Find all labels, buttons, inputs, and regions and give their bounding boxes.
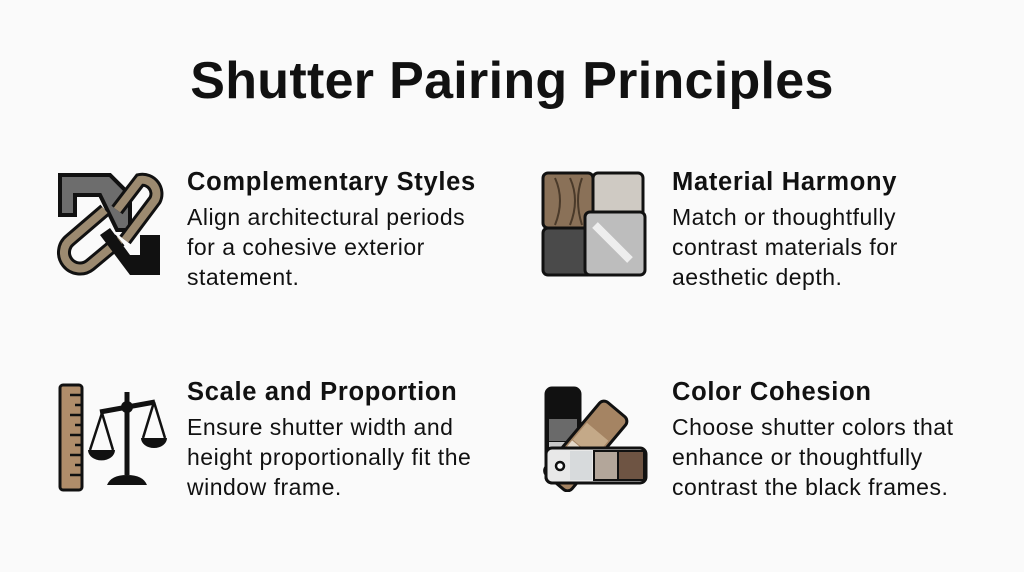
item: complementary styles: statement.: [187, 264, 299, 290]
item: scale and proportion: height proportionally fit the: [187, 444, 471, 470]
item: color cohesion: [672, 378, 953, 500]
item: material harmony: aesthetic depth.: [672, 264, 842, 290]
item: color cohesion: Color Cohesion: [672, 378, 872, 406]
item: color cohesion: Choose shutter colors that: [672, 414, 953, 440]
item: scale and proportion: Ensure shutter width and: [187, 414, 453, 440]
item: scale and proportion: window frame.: [187, 474, 342, 500]
item: color cohesion: enhance or thoughtfully: [672, 444, 923, 470]
item: color cohesion: contrast the black frames.: [672, 474, 948, 500]
icon: color fan: [543, 386, 648, 492]
icon: ruler and scale: [58, 384, 167, 492]
item: material harmony: Match or thoughtfully: [672, 204, 896, 230]
item: complementary styles: for a cohesive exterior: [187, 234, 425, 260]
item: complementary styles: Align architectural periods: [187, 204, 465, 230]
title: Shutter Pairing Principles: [190, 52, 834, 110]
item: complementary styles: Complementary Styles: [187, 168, 476, 196]
item: complementary styles: [187, 168, 476, 290]
item: scale and proportion: Scale and Proportion: [187, 378, 457, 406]
item: material harmony: [672, 168, 898, 290]
item: scale and proportion: [187, 378, 471, 500]
icon: interlocking links: [56, 172, 164, 276]
item: material harmony: contrast materials for: [672, 234, 898, 260]
item: material harmony: Material Harmony: [672, 168, 897, 196]
icon: material swatches: [542, 172, 646, 276]
